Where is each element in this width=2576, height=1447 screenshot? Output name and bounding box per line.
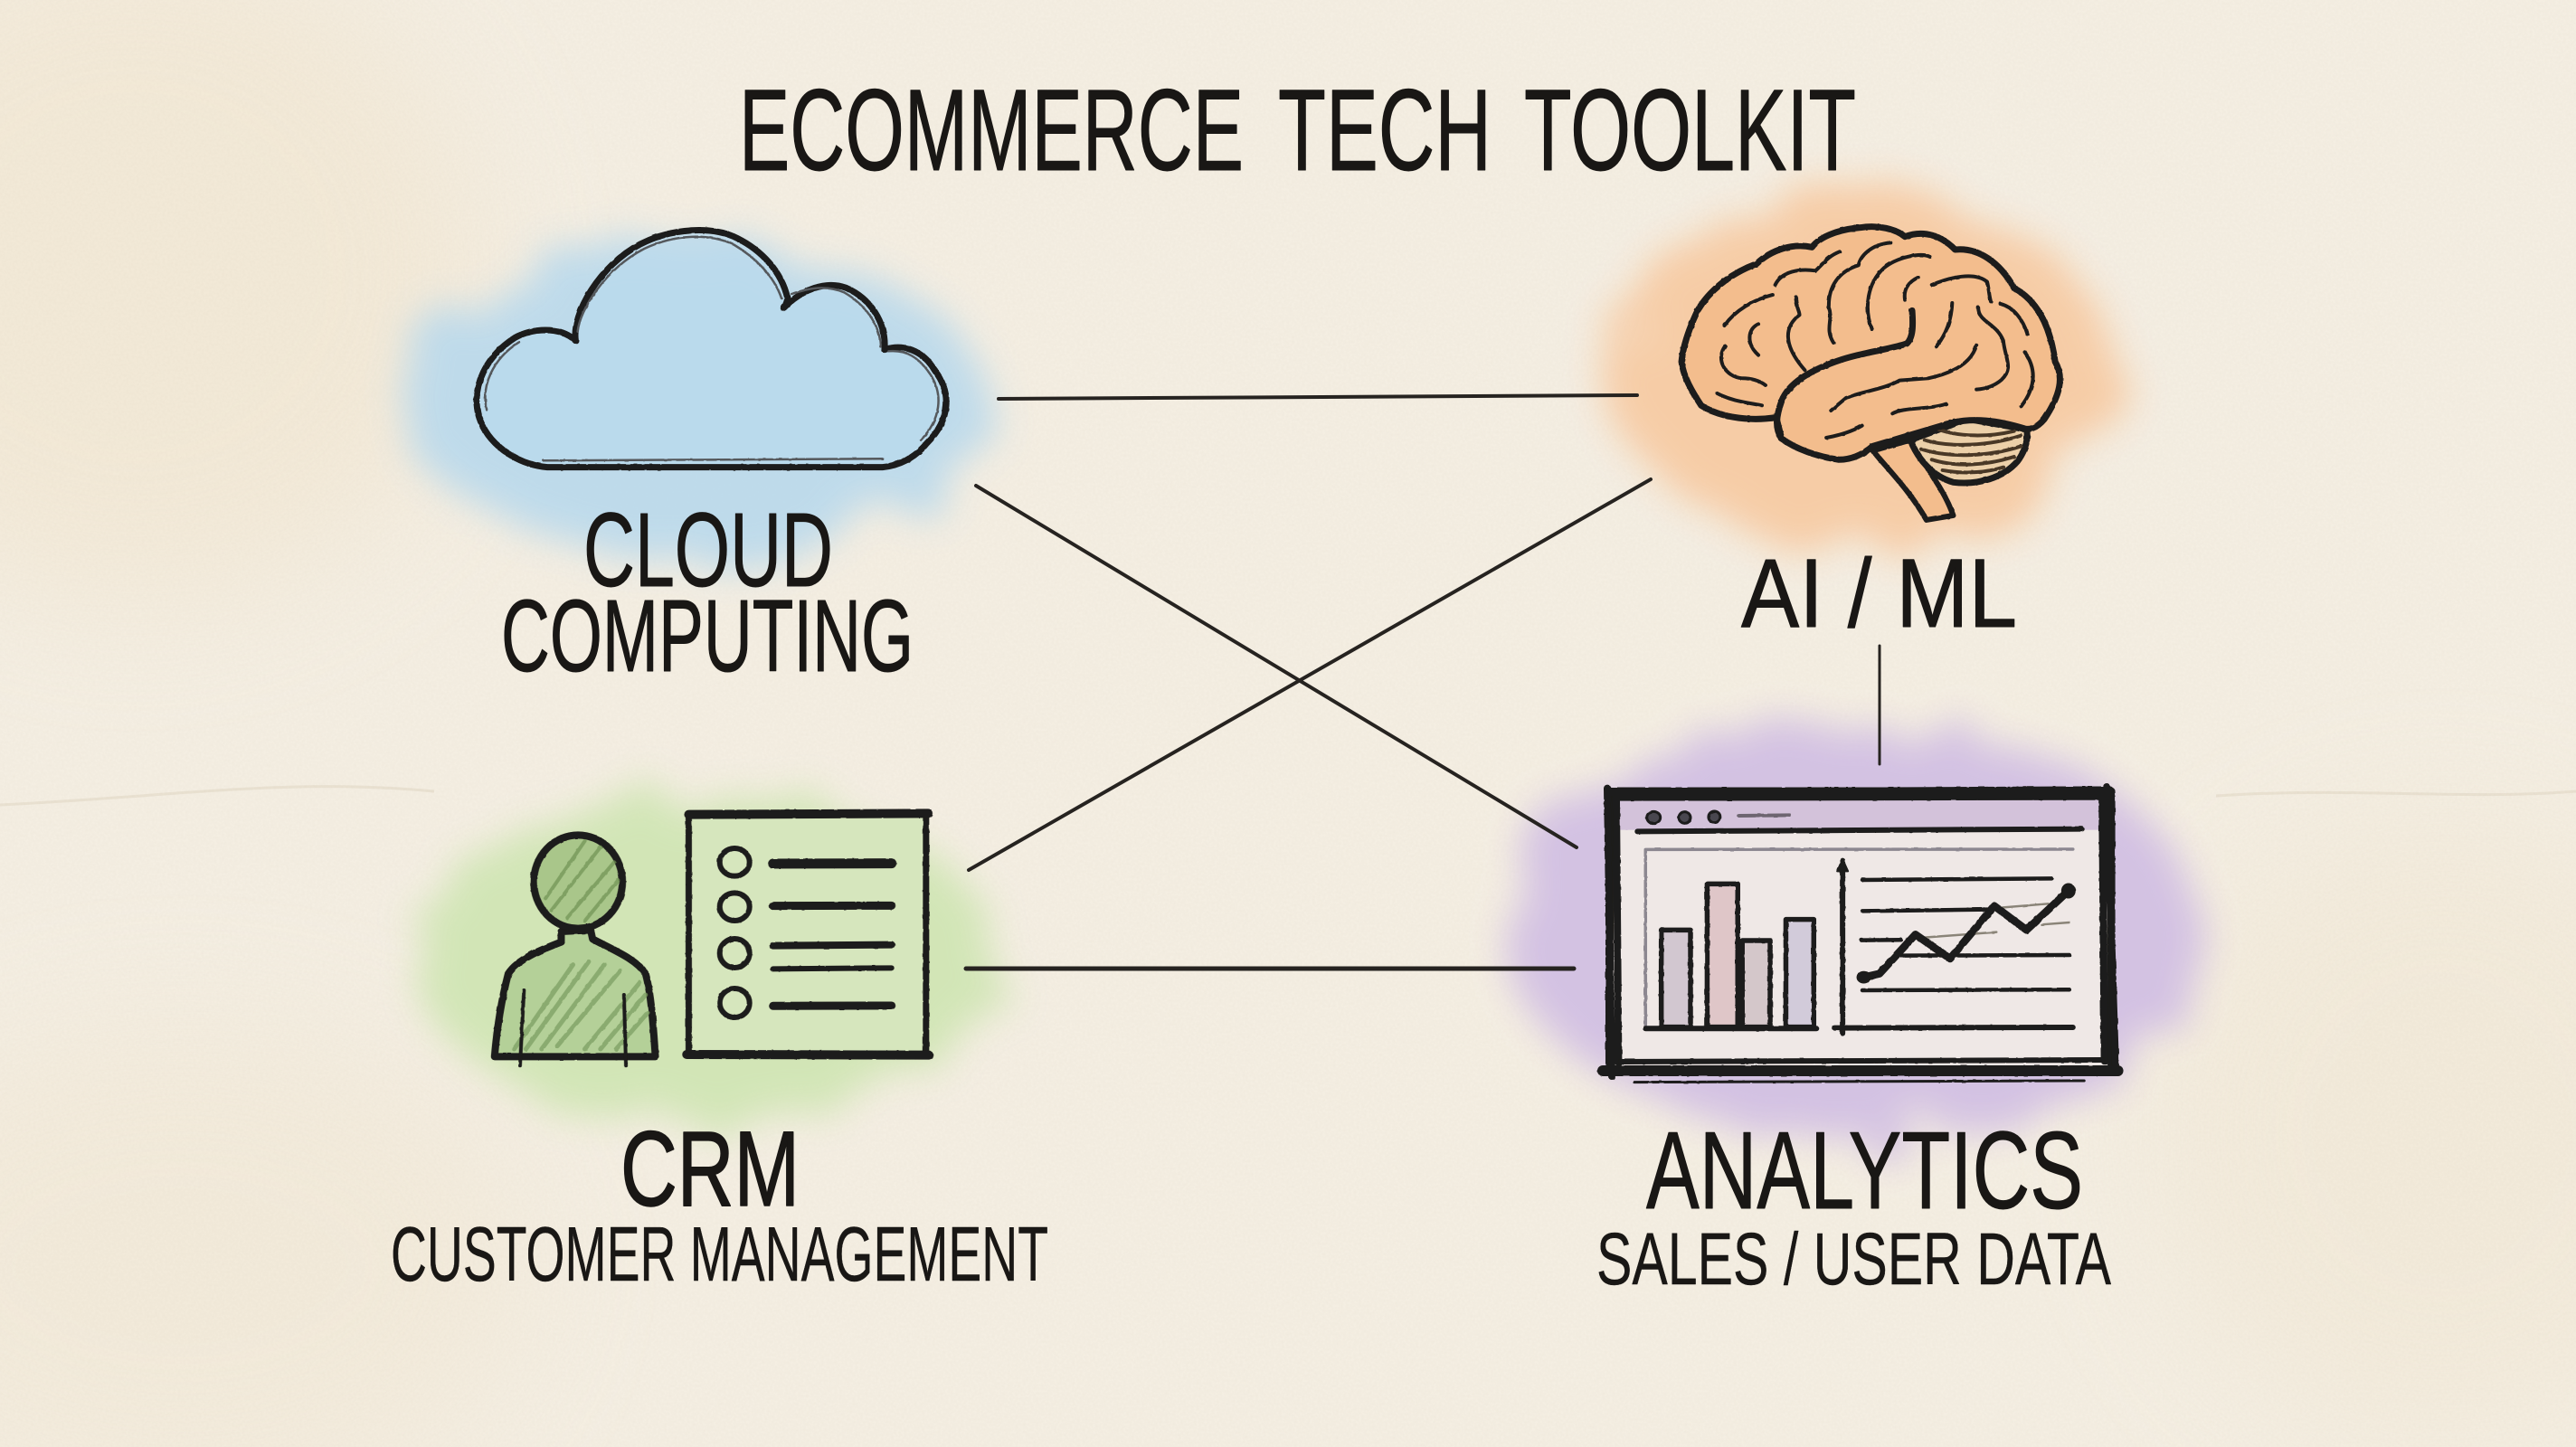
cerebellum (1910, 419, 2027, 483)
watercolor wash: brain (1610, 194, 2117, 547)
icon: cloud (477, 231, 946, 468)
window frame (1603, 787, 2118, 1083)
line: CRM to analytics (966, 966, 1574, 971)
icon: customer and contact list (495, 813, 929, 1065)
temporal lobe (1777, 310, 1913, 439)
contact list card (687, 813, 929, 1055)
SALES / USER DATA: SALES / USER DATA (1596, 1218, 2111, 1300)
label: CRM (391, 1110, 1048, 1298)
line: AI to analytics (1878, 646, 1881, 764)
watercolor wash: cloud (401, 244, 989, 561)
brain stem (1873, 440, 1953, 520)
bar chart (1645, 884, 1816, 1028)
watercolor wash: analytics (1506, 724, 2202, 1140)
CRM: CRM (620, 1110, 800, 1229)
watercolor wash: CRM (412, 796, 999, 1121)
panel frame (1645, 849, 2073, 1026)
ANALYTICS: ANALYTICS (1646, 1109, 2083, 1232)
line chart (1834, 859, 2075, 1034)
line: cloud to AI (999, 395, 1637, 399)
icon: brain (1681, 227, 2060, 520)
window controls (1647, 811, 1720, 824)
CLOUD: CLOUD (583, 491, 833, 609)
label: AI / ML: AI / ML (1741, 538, 2017, 648)
label: cloud computing (501, 491, 914, 693)
label: analytics (1596, 1109, 2111, 1300)
title word: TECH: TECH (1278, 66, 1492, 195)
COMPUTING: COMPUTING (501, 579, 914, 693)
title (739, 66, 1856, 195)
person (495, 835, 656, 1065)
icon: analytics dashboard window (1603, 787, 2118, 1083)
gyri (1718, 242, 2033, 438)
title word: ECOMMERCE: ECOMMERCE (739, 66, 1244, 195)
CUSTOMER MANAGEMENT: CUSTOMER MANAGEMENT (391, 1212, 1048, 1298)
cerebrum (1681, 227, 2060, 459)
line: CRM to AI (969, 479, 1651, 870)
connector lines (966, 395, 1880, 969)
line: cloud to analytics (976, 486, 1577, 847)
title word: TOOLKIT: TOOLKIT (1524, 66, 1856, 195)
